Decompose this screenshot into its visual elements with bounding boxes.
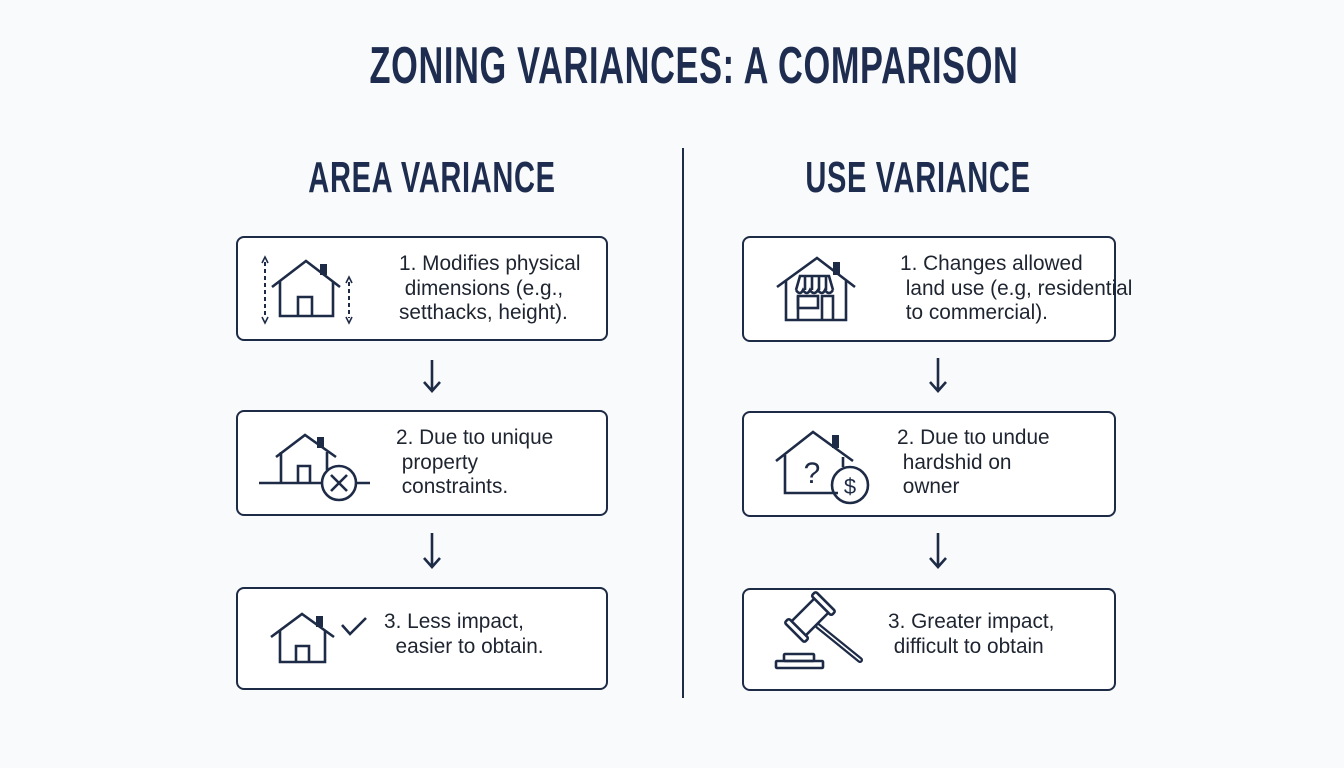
arrow: area 2 to 3	[424, 533, 440, 567]
text: area step 1: setthacks, height).	[399, 301, 568, 324]
text: use step 2	[897, 426, 1050, 498]
panel: area step 3	[236, 587, 608, 690]
icon: house with question and dollar: ?	[804, 457, 820, 490]
icon: house with dimensions	[262, 257, 352, 323]
panel: use step 2	[742, 411, 1116, 517]
text: area step 3: 3. Less impact,	[384, 610, 524, 633]
icon: house with question and dollar	[776, 432, 868, 503]
arrow: area 1 to 2	[424, 360, 440, 391]
icon: storefront house	[777, 258, 855, 320]
text: use step 3: 3. Greater impact,	[888, 610, 1054, 633]
icon: gavel	[776, 592, 860, 668]
text: use step 2: hardshid on	[903, 450, 1011, 474]
icon: house with check	[271, 614, 366, 662]
text: area step 1: 1. Modifies physical	[399, 252, 580, 275]
title: ZONING VARIANCES: A COMPARISON	[369, 37, 1019, 95]
text: area step 2: 2. Due tɩo unique	[396, 426, 553, 449]
icon: house with question and dollar: $	[844, 474, 856, 499]
text: use step 1: 1. Changes allowed	[900, 252, 1083, 275]
text: use step 2: 2. Due tɩo undue	[897, 426, 1050, 449]
divider line	[682, 148, 684, 698]
arrow: use 2 to 3	[930, 533, 946, 567]
heading: area variance: AREA VARIANCE	[308, 153, 556, 202]
text: area step 1	[399, 252, 580, 324]
text: use step 3: difficult to obtain	[894, 634, 1044, 658]
text: area step 2: property	[402, 450, 478, 474]
text: use step 2: owner	[903, 475, 959, 498]
panel: area step 2	[236, 410, 608, 516]
text: use step 1: to commercial).	[906, 301, 1048, 324]
text: use step 1: land use (e.g, residential	[906, 276, 1132, 300]
text: area step 1: dimensions (e.g.,	[405, 276, 563, 300]
text: area step 2: constraints.	[402, 475, 508, 498]
heading: use variance: USE VARIANCE	[805, 153, 1031, 202]
text: area step 2	[396, 426, 553, 498]
text: area step 3	[384, 610, 544, 658]
panel: area step 1	[236, 236, 608, 341]
panel: use step 3	[742, 588, 1116, 691]
panel: use step 1	[742, 236, 1116, 342]
text: use step 3	[888, 610, 1054, 658]
arrow: use 1 to 2	[930, 358, 946, 391]
text: use step 1	[900, 252, 1132, 324]
icon: house with x constraint	[259, 435, 370, 500]
text: area step 3: easier to obtain.	[396, 634, 544, 658]
